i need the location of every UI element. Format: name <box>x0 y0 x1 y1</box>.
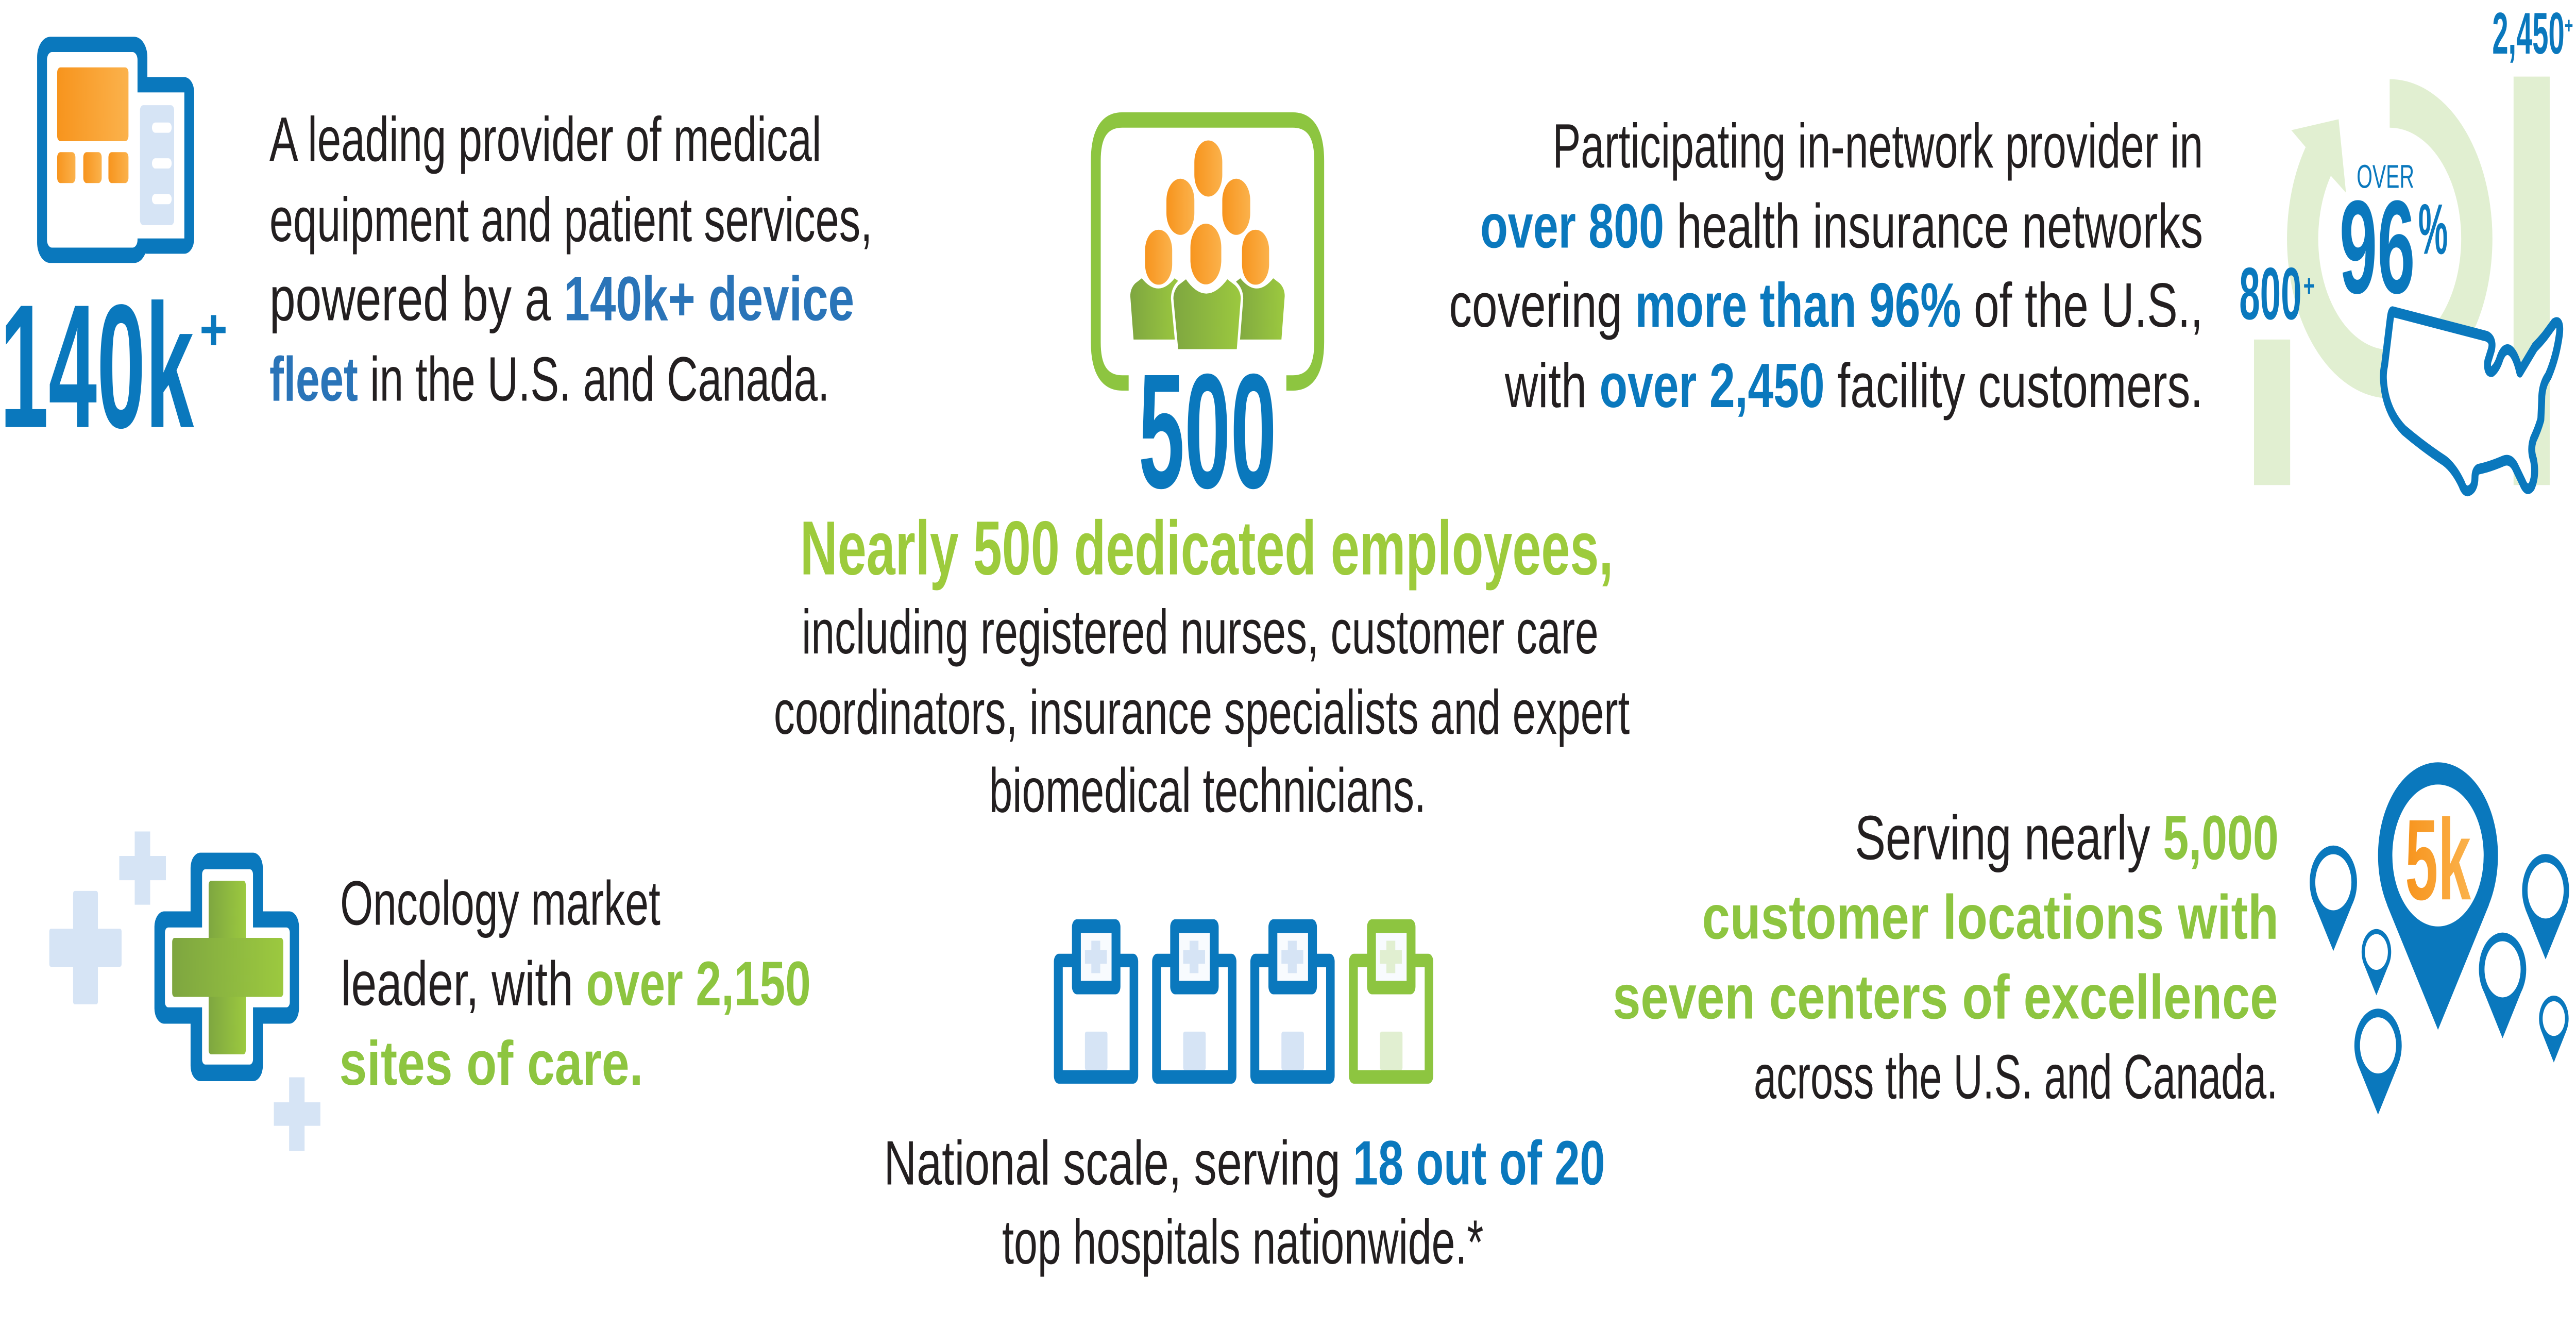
text: locations description: Serving nearly 5,000 <box>1855 803 2279 873</box>
text: oncology description <box>339 868 811 1098</box>
panel: oncology <box>49 831 811 1151</box>
icon: hospitals row <box>1054 919 1433 1084</box>
label: 800+: 800 <box>2239 253 2301 335</box>
big number: 140k+: + <box>199 297 228 363</box>
icon: big pin 5k <box>2378 762 2498 1030</box>
text: network description: covering more than 96% of the U.S., <box>1449 271 2203 340</box>
text: locations description: across the U.S. and Canada. <box>1754 1042 2278 1112</box>
panel: top hospitals <box>884 919 1605 1277</box>
icon: big pin 5k: 5k <box>2405 795 2471 924</box>
text: device fleet description: equipment and patient services, <box>269 185 872 255</box>
panel: customer locations <box>1613 762 2569 1115</box>
text: hospitals description: top hospitals nationwide.* <box>1002 1207 1483 1277</box>
label: over 96%: OVER <box>2357 159 2414 195</box>
label: 800+: + <box>2303 268 2315 303</box>
text: device fleet description: fleet in the U.S. and Canada. <box>269 344 829 414</box>
text: network description <box>1449 111 2203 421</box>
text: oncology description: sites of care. <box>339 1028 643 1098</box>
icon: small pin E <box>2522 854 2569 960</box>
icon: medical cross with sparkles <box>49 831 320 1151</box>
icon: small pin A <box>2310 846 2357 951</box>
big number: 140k+: 140k <box>0 268 194 464</box>
text: employee description: coordinators, insurance specialists and expert <box>774 678 1630 747</box>
text: device fleet description: powered by a 140k+ device <box>269 264 854 334</box>
label: 2,450+: + <box>2565 12 2573 38</box>
text: network description: Participating in-network provider in <box>1552 111 2203 181</box>
icon: small pin D <box>2479 933 2526 1038</box>
text: employee description: including registered nurses, customer care <box>802 597 1599 667</box>
heading: nearly 500 dedicated employees: Nearly 500 dedicated employees, <box>800 506 1613 591</box>
icon: medical device <box>37 37 194 263</box>
text: oncology description: Oncology market <box>340 868 660 938</box>
text: network description: over 800 health insurance networks <box>1480 191 2203 261</box>
text: locations description: customer locations with <box>1702 882 2279 952</box>
text: device fleet description <box>269 105 872 414</box>
icon: hospital 3 <box>1250 919 1335 1084</box>
icon: hospital 1 <box>1054 919 1138 1084</box>
icon: people group <box>1130 140 1285 351</box>
big number: 500: 500 <box>1139 341 1277 523</box>
bar: 2,450+ <box>2514 77 2550 485</box>
text: hospitals description: National scale, serving 18 out of 20 <box>884 1128 1605 1198</box>
icon: hospital 4 green <box>1349 919 1433 1084</box>
icon: green frame <box>1096 120 1319 383</box>
icon: hospital 2 <box>1152 919 1236 1084</box>
icon: small pin B <box>2362 929 2391 996</box>
text: locations description: seven centers of excellence <box>1613 962 2278 1032</box>
ring arrow <box>2302 104 2477 374</box>
text: hospitals description <box>884 1128 1605 1277</box>
bar: 800+ <box>2254 340 2290 485</box>
panel: device fleet <box>0 37 872 464</box>
text: oncology description: leader, with over 2,150 <box>341 949 811 1018</box>
panel: insurance networks <box>1449 1 2573 491</box>
text: employee description: biomedical technicians. <box>989 755 1426 825</box>
text: employee description <box>774 597 1630 825</box>
icon: small pin F <box>2539 996 2569 1063</box>
label: over 96%: 96 <box>2340 173 2415 321</box>
chart: coverage graphic <box>2239 1 2573 491</box>
icon: US map <box>2383 312 2560 491</box>
icon: small pin C <box>2354 1008 2402 1115</box>
icon: map pins <box>2310 762 2569 1115</box>
text: network description: with over 2,450 facility customers. <box>1504 351 2203 421</box>
label: over 96%: % <box>2418 189 2448 269</box>
text: locations description <box>1613 803 2279 1112</box>
panel: employees <box>774 120 1630 825</box>
text: device fleet description: A leading provider of medical <box>269 105 821 174</box>
